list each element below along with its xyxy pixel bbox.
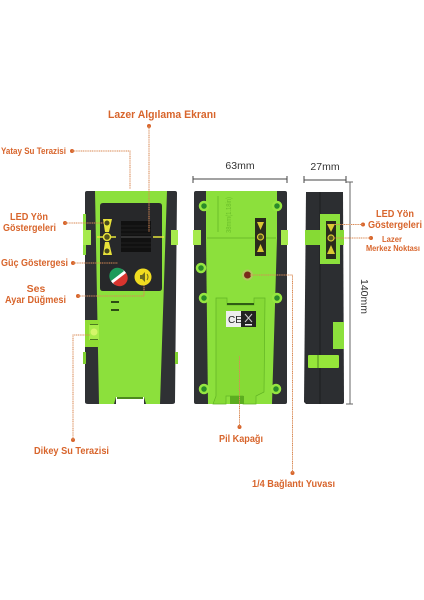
callout: Yatay Su Terazisi: Yatay Su Terazisi: [1, 146, 66, 156]
callout: Dikey Su Terazisi: Dikey Su Terazisi: [34, 445, 109, 457]
CE label: CE: [228, 315, 242, 326]
side slider: [308, 355, 339, 368]
dimension: 27mm: 27mm: [310, 161, 340, 173]
rear LED panel: [255, 218, 266, 256]
callout: Yatay Su Terazisi: [1, 146, 130, 189]
battery cover: [213, 298, 265, 404]
power button: [109, 268, 128, 286]
callout: Güç Göstergesi: Güç Göstergesi: [1, 257, 68, 269]
callout: Dikey Su Terazisi: [34, 335, 109, 457]
callout: Pil Kapağı: [219, 356, 263, 445]
vertical bubble level: [85, 320, 99, 347]
side bubble level: [333, 322, 344, 349]
volume button: [134, 268, 152, 286]
callout: 1/4 Bağlantı Yuvası: [250, 275, 335, 490]
dimension: 140mm: [346, 182, 370, 404]
ruler marking: [218, 196, 233, 233]
vents: [111, 301, 119, 311]
callout: Lazer Algılama Ekranı: Lazer Algılama Ekranı: [108, 109, 216, 121]
LED direction indicators: [97, 219, 164, 255]
callout: Lazer Merkez Noktası: [334, 235, 420, 253]
callout: LED Yön Göstergeleri left: [3, 211, 104, 234]
callout: Ses Ayar Düğmesi: Ayar Düğmesi: [5, 294, 66, 306]
callout: Lazer Algılama Ekranı: [108, 109, 216, 232]
dimension: 27mm: [304, 161, 346, 183]
callout: Pil Kapağı: Pil Kapağı: [219, 433, 263, 445]
mounting hole: [242, 270, 253, 280]
callout: Lazer Merkez Noktası: Merkez Noktası: [366, 244, 420, 253]
callout: Güç Göstergesi: [1, 257, 118, 269]
side view device: [304, 192, 344, 404]
dimension: 140mm: 140mm: [358, 279, 370, 314]
callout: LED Yön Göstergeleri right: [334, 208, 422, 231]
callout: LED Yön Göstergeleri left: Göstergeleri: [3, 222, 56, 234]
dimension: 63mm: 63mm: [225, 160, 255, 172]
back view device: [193, 191, 288, 404]
ruler marking: 38mm(1.18in): [226, 197, 233, 233]
callout: Lazer Merkez Noktası: Lazer: [382, 235, 402, 244]
callout: LED Yön Göstergeleri left: LED Yön: [10, 211, 48, 223]
side LED panel: [305, 214, 344, 264]
screws: [197, 202, 281, 393]
display panel: [100, 203, 162, 291]
front view device: [83, 191, 178, 404]
callout: LED Yön Göstergeleri right: LED Yön: [376, 208, 414, 220]
callout: 1/4 Bağlantı Yuvası: 1/4 Bağlantı Yuvası: [252, 478, 335, 490]
callout: Ses Ayar Düğmesi: [5, 283, 144, 306]
callout: Ses Ayar Düğmesi: Ses: [27, 283, 45, 295]
dimension: 63mm: [193, 160, 287, 183]
